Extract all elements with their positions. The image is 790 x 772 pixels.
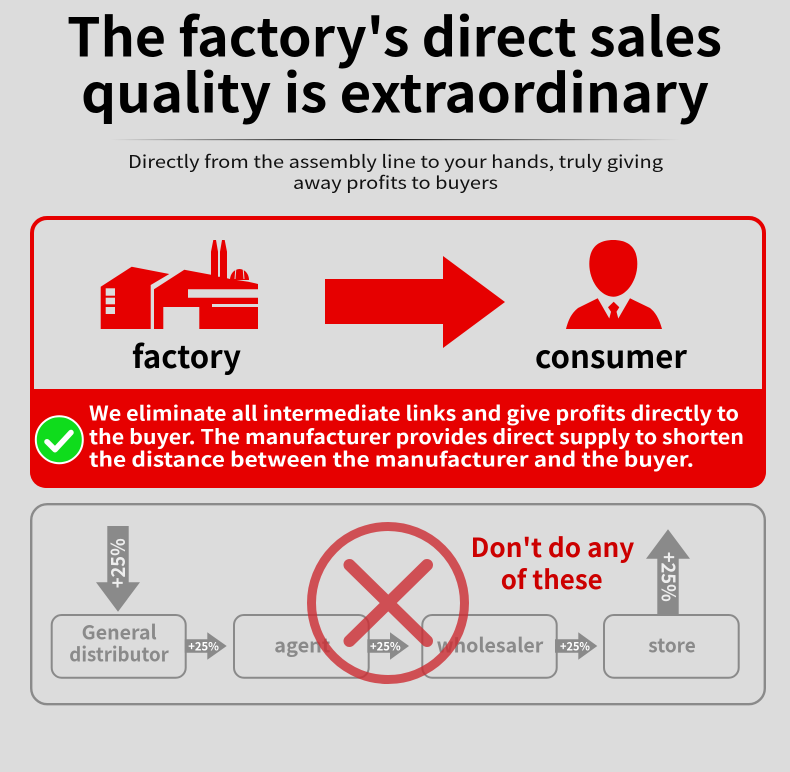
box: store — [604, 615, 739, 678]
warning text: Don't do any — [471, 528, 634, 565]
box: wholesaler: wholesaler — [437, 630, 544, 658]
box: wholesaler — [422, 615, 557, 678]
banner text: We eliminate all intermediate links and give profits directly to — [89, 398, 739, 427]
arrow: out of store +25% — [646, 529, 690, 615]
title — [67, 0, 722, 128]
subtitle — [128, 149, 663, 195]
arrow: agent to wholesaler +25%: +25% — [370, 638, 401, 654]
box: general distributor: distributor — [69, 638, 169, 668]
box: agent — [234, 615, 369, 678]
arrow: wholesaler to store +25%: +25% — [560, 638, 590, 654]
panel: direct supply — [30, 218, 766, 488]
label: consumer: consumer — [535, 332, 687, 377]
panel: middlemen chain — [31, 504, 765, 704]
subtitle: away profits to buyers — [293, 170, 498, 195]
icon: green check — [36, 416, 83, 463]
warning text — [471, 528, 634, 597]
box: general distributor — [52, 615, 186, 678]
title: quality is extraordinary — [81, 52, 709, 128]
banner text: the buyer. The manufacturer provides direct supply to shorten — [89, 421, 744, 450]
box: general distributor: General — [82, 616, 157, 646]
red banner — [30, 389, 766, 488]
arrow: distributor to agent +25%: +25% — [188, 638, 219, 654]
arrow: into distributor +25%: +25% — [102, 538, 131, 588]
arrow: distributor to agent +25% — [185, 632, 227, 660]
banner text: the distance between the manufacturer and the buyer. — [89, 444, 694, 473]
icon: factory — [101, 240, 258, 329]
box: agent: agent — [274, 630, 330, 658]
arrow: out of store +25%: +25% — [656, 552, 685, 602]
box: store: store — [648, 630, 696, 658]
label: factory: factory — [132, 332, 241, 377]
warning text: of these — [501, 560, 603, 597]
icon: consumer — [566, 240, 662, 329]
arrow: wholesaler to store +25% — [555, 632, 597, 660]
arrow: into distributor +25% — [96, 526, 140, 612]
subtitle: Directly from the assembly line to your hands, truly giving — [128, 149, 663, 174]
arrow: factory to consumer — [325, 256, 505, 348]
icon: prohibition cross — [312, 526, 464, 680]
arrow: agent to wholesaler +25% — [367, 632, 409, 660]
banner text — [89, 398, 744, 473]
